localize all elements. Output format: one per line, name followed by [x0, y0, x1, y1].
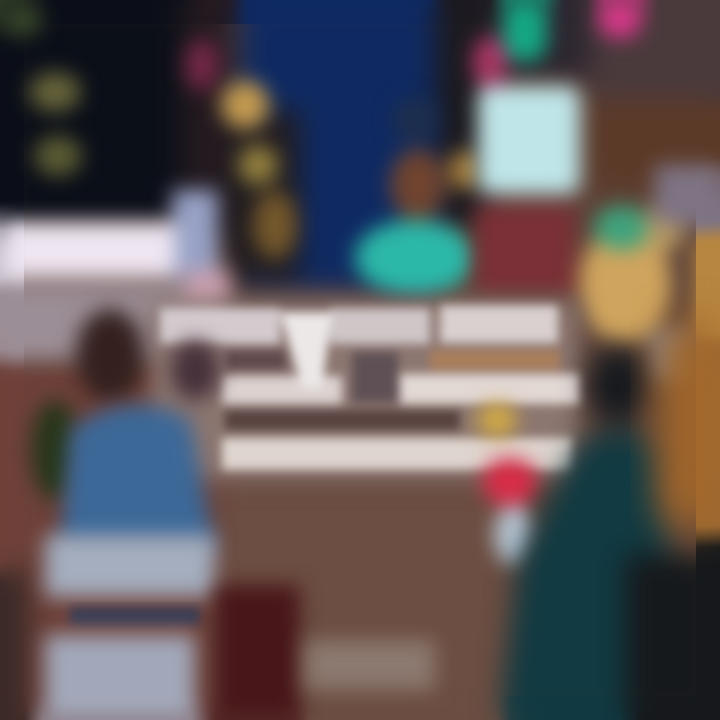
person in teal shirt	[355, 98, 481, 296]
shoulder plant	[31, 400, 79, 500]
left man	[31, 309, 219, 720]
right signs and lights	[472, 0, 720, 380]
blue shirt	[60, 405, 215, 550]
pale ground band	[305, 640, 435, 690]
coloured lanterns	[477, 403, 538, 565]
left building windows	[2, 4, 219, 176]
dark waist	[70, 607, 200, 625]
head	[76, 309, 144, 401]
string lights	[221, 81, 297, 259]
central white sign with text bands	[150, 300, 580, 480]
white shirt band upper	[45, 535, 215, 597]
right person	[500, 347, 720, 720]
left white sign	[0, 190, 230, 360]
right orange person	[660, 320, 720, 530]
nearby face	[171, 340, 219, 400]
white shirt band lower	[45, 635, 195, 720]
dark red object	[215, 585, 300, 720]
